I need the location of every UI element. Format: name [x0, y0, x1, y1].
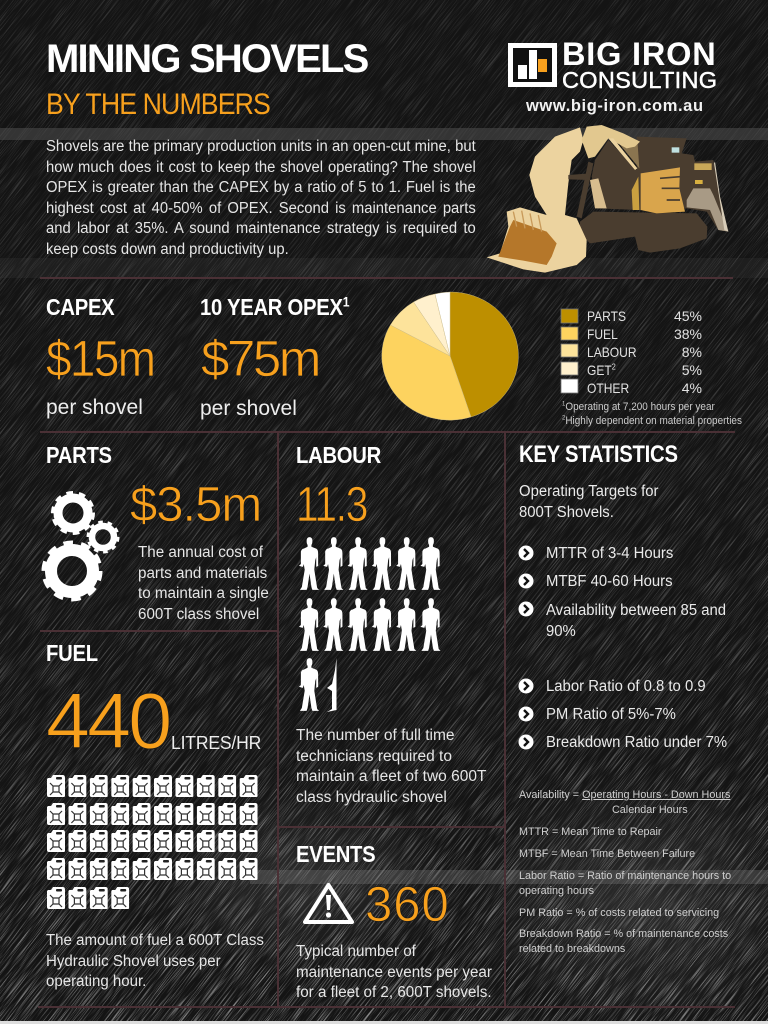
unit: LITRES/HR — [171, 732, 261, 753]
definition: MTBF: MTBF = Mean Time Between Failure — [519, 848, 695, 860]
legend labels: LABOUR — [587, 344, 637, 360]
value: $15m — [46, 330, 154, 387]
legend labels: OTHER — [587, 380, 629, 396]
intro text — [46, 138, 476, 258]
description — [138, 544, 269, 623]
panel: fuel — [46, 640, 264, 990]
legend labels: GET2 — [587, 361, 616, 378]
description — [296, 943, 492, 1001]
definition: PM ratio: PM Ratio = % of costs related to servicing — [519, 907, 719, 919]
definition: labor ratio: Labor Ratio = Ratio of maintenance hours to — [519, 870, 731, 882]
legend — [560, 308, 742, 426]
website: www.big-iron.com.au — [526, 97, 704, 115]
panel: events — [296, 841, 492, 1001]
stat: breakdown ratio: Breakdown Ratio under 7% — [546, 734, 727, 751]
description — [46, 932, 264, 990]
heading: CAPEX — [46, 294, 114, 320]
definition: MTTR: MTTR = Mean Time to Repair — [519, 826, 662, 838]
caption: per shovel — [46, 396, 143, 419]
description: maintenance events per year — [296, 964, 492, 981]
intro text: how much does it cost to keep the shovel operating? The shovel — [46, 159, 476, 176]
legend values: 4% — [682, 380, 702, 396]
definition: availability formula: Calendar Hours — [612, 804, 688, 816]
value: 440 — [46, 676, 169, 765]
icon array: fuel cans — [47, 775, 258, 909]
legend labels — [587, 308, 637, 396]
definition: availability formula — [519, 789, 730, 816]
stat: MTTR: MTTR of 3-4 Hours — [546, 545, 673, 562]
definition: breakdown ratio — [519, 928, 728, 955]
description: for a fleet of 2, 600T shovels. — [296, 984, 492, 1001]
icon: logo bars — [508, 43, 557, 87]
heading: 10 YEAR OPEX1 — [200, 294, 349, 320]
footnotes: 1Operating at 7,200 hours per year — [562, 400, 715, 413]
description: maintain a fleet of two 600T — [296, 768, 486, 785]
definition: availability formula: Availability = Operating Hours - Down Hours — [519, 789, 730, 801]
description: technicians required to — [296, 748, 452, 765]
value: $75m — [201, 330, 319, 387]
heading: LABOUR — [296, 442, 381, 468]
description: class hydraulic shovel — [296, 789, 447, 806]
stat: labor ratio: Labor Ratio of 0.8 to 0.9 — [546, 678, 706, 695]
description: Typical number of — [296, 943, 416, 960]
legend values — [674, 308, 702, 396]
intro: 800T Shovels. — [519, 504, 614, 521]
panel: opex — [200, 294, 350, 420]
description: operating hour. — [46, 973, 146, 990]
legend swatches — [560, 308, 578, 394]
footnotes: 2Highly dependent on material properties — [562, 414, 742, 426]
icon: gears — [42, 491, 120, 602]
panel: capex — [46, 294, 154, 419]
panel: labour — [296, 442, 486, 806]
definition: breakdown ratio: Breakdown Ratio = % of maintenance costs — [519, 928, 728, 940]
panel: key statistics — [518, 441, 731, 955]
stat: PM ratio: PM Ratio of 5%-7% — [546, 706, 676, 723]
definition: labor ratio: operating hours — [519, 885, 594, 897]
heading: FUEL — [46, 640, 98, 666]
stat: MTBF: MTBF 40-60 Hours — [546, 573, 673, 590]
legend values: 5% — [682, 362, 702, 378]
intro text: Shovels are the primary production units in an open-cut mine, but — [46, 138, 476, 155]
definition: labor ratio — [519, 870, 731, 897]
intro text: keep costs down and productivity up. — [46, 241, 289, 258]
logo — [508, 36, 717, 115]
caption: per shovel — [200, 397, 297, 420]
title: MINING SHOVELS — [46, 37, 368, 81]
description: Hydraulic Shovel uses per — [46, 953, 221, 970]
heading: EVENTS — [296, 841, 375, 867]
icon array: technicians — [299, 537, 440, 712]
stat: availability: 90% — [546, 623, 576, 640]
footnotes — [562, 400, 742, 426]
logo wordmark: BIG IRON — [562, 36, 716, 72]
intro text: OPEX is greater than the CAPEX by a ratio of 5 to 1. Fuel is the — [46, 179, 476, 196]
description — [296, 727, 486, 806]
legend values: 38% — [674, 326, 702, 342]
description: The annual cost of — [138, 544, 263, 561]
description: to maintain a single — [138, 585, 269, 602]
definition: breakdown ratio: related to breakdowns — [519, 943, 625, 955]
icon: warning triangle — [303, 882, 354, 924]
intro — [519, 483, 659, 521]
description: The number of full time — [296, 727, 455, 744]
legend labels: PARTS — [587, 308, 626, 324]
description: The amount of fuel a 600T Class — [46, 932, 264, 949]
logo subline: CONSULTING — [562, 67, 717, 93]
panel: parts — [42, 442, 269, 623]
description: parts and materials — [138, 565, 267, 582]
heading: KEY STATISTICS — [519, 441, 678, 468]
subtitle: BY THE NUMBERS — [46, 88, 270, 121]
intro text: highest cost at 40-50% of OPEX. Second is maintenance parts — [46, 200, 476, 217]
intro text: and labor at 35%. A sound maintenance strategy is required to — [46, 220, 476, 237]
value: 11.3 — [296, 478, 367, 532]
stat: availability — [546, 602, 726, 640]
intro: Operating Targets for — [519, 483, 659, 500]
legend values: 45% — [674, 308, 702, 324]
value: $3.5m — [130, 478, 261, 532]
legend labels: FUEL — [587, 326, 618, 342]
legend values: 8% — [682, 344, 702, 360]
heading: PARTS — [46, 442, 112, 468]
bullet icons — [518, 546, 534, 750]
description: 600T class shovel — [138, 606, 259, 623]
value: 360 — [365, 878, 450, 932]
stat: availability: Availability between 85 and — [546, 602, 726, 619]
